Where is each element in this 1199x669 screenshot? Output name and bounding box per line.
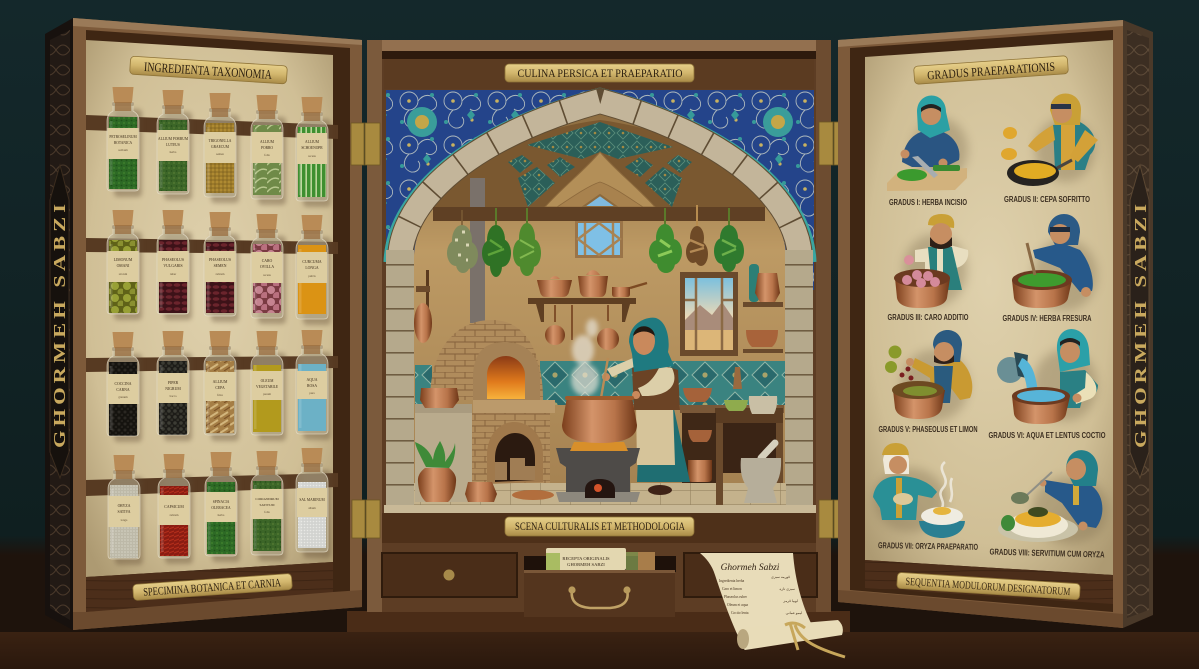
jar 8: rubrum [216,272,225,276]
jar 7: PHASEOLUS [162,258,184,262]
jar 5 [296,97,331,207]
recipe lines: لوبیا قرمز [782,598,798,603]
step 7: rice preparation [873,443,978,552]
jar 1: BOTANICA [114,141,133,145]
lattice window [575,221,623,258]
tile spandrel panel [386,90,814,290]
head scarf [629,318,674,372]
jar 1: PETROSELINUM [109,135,137,139]
heading plaque: culina persica et praeparatio [505,64,694,82]
step 4 label: GRADUS IV: HERBA FRESURA [1002,313,1092,323]
jar 19: CORIANDRUM [255,497,279,501]
jar 18: OLERACEA [211,506,231,510]
right spine with title [1123,20,1153,628]
jar 16: SATIVA [117,510,131,514]
jar 1 [107,87,142,197]
potted plant [415,441,456,502]
shelf with copper pots [528,270,647,322]
wooden floor [0,632,1199,669]
jar 16: ORYZA [118,504,131,508]
jars row 4 [108,448,331,565]
pitcher [997,357,1023,383]
jar 18: SPINACIA [213,500,230,504]
jar 13: CEPA [215,386,225,390]
jar 8 [204,212,239,322]
shoes [648,485,672,495]
jar 9: CARO [262,259,273,263]
recipe lines: لیمو عمانی [786,610,802,615]
jar 18: herba [218,513,225,517]
jar 9: recens [263,273,272,277]
panel: central kitchen cabinet [347,40,850,632]
jar 16: longa [121,518,128,522]
panel: ingredient taxonomy (left door) [45,18,362,630]
pot with greens [1012,280,1072,308]
jar 4: folia [264,153,270,157]
step 3: meat adding [888,214,969,322]
jar 15: pura [309,391,315,395]
cabinet base [347,611,850,632]
right spine with title: GHORMEH SABZI [1131,200,1150,448]
heading plaque: ingredienta taxonomia: INGREDIENTA TAXONOMIA [144,59,273,82]
scroll: recipe parchment: Ghormeh Sabzi [721,563,780,573]
jar 9 [251,214,286,324]
tile medallions [407,107,437,137]
jar 7: ruber [170,272,176,276]
recipe lines: Coctio lenta [731,611,749,615]
drawer contents: rolled label: RECEPTA ORIGINALIS [562,556,610,561]
recipe lines [719,575,802,615]
herb bunch: mint [714,208,744,272]
drawer contents: rolled label: GHORMEH SABZI [567,562,605,567]
pot 2 [578,270,608,297]
heading plaque: gradus praeparationis: GRADUS PRAEPARATIONIS [927,60,1055,82]
recipe lines: قورمه سبزی [771,575,790,579]
jars row 3 [107,330,331,442]
step 1: herb chopping [887,96,968,207]
jar 3: semen [216,152,224,156]
heading plaque: culina persica et praeparatio: CULINA PERSICA ET PRAEPARATIO [518,68,682,80]
counter and table with vessels [680,367,784,505]
step 7 label: GRADUS VII: ORYZA PRAEPARATIO [878,540,978,552]
jar 5: recens [308,154,317,158]
caption plaque: scena culturalis et methodologia: SCENA CULTURALIS ET METHODOLOGIA [515,521,686,533]
jar 13 [204,331,239,441]
step 2 label: GRADUS II: CEPA SOFRITTO [1004,194,1090,204]
recipe lines: سبزی تازه [779,586,796,591]
jar 6: siccum [119,272,128,276]
scroll: recipe parchment [700,553,845,657]
step 4: fresh herb frying [1002,214,1097,323]
herb bunch: white flowers [447,210,478,273]
jar 11: COCCINA [114,382,132,386]
jar 14: OLEUM [261,379,274,383]
desert window [680,272,738,356]
sleeve arm [607,358,674,396]
jar 20 [296,448,331,558]
jar 9: OVILLA [260,265,274,269]
stove [556,442,640,502]
step 6: water and slow cooking [988,329,1106,440]
jars row 2 [107,210,331,325]
shelf rails [86,115,338,496]
figure [900,96,959,168]
jar 11 [107,332,142,442]
rice bowl [919,521,965,538]
drawer contents: rolled label [524,548,676,572]
step 1 label: GRADUS I: HERBA INCISIO [889,197,967,207]
gold ribbon [785,623,845,657]
vault with mosaic tiles [433,120,767,207]
jar 6: LIMONUM [114,258,133,262]
herb bunch: dark parsley [482,208,511,277]
recipe lines: Oleum et aqua [727,603,748,607]
jar 16 [108,455,143,565]
ladle [1027,472,1052,495]
jar 14 [251,331,286,441]
steam [571,319,599,396]
herb bunch: broad leaves [649,208,682,273]
pot with stew [893,390,945,419]
jar 3 [204,93,239,203]
stone pillars [386,250,414,506]
hair [633,326,655,336]
footer plaque: sequentia modulorum designatorum: SEQUENTIA MODULORUM DESIGNATORUM [905,576,1071,598]
step 8 label: GRADUS VIII: SERVITIUM CUM ORYZA [989,546,1105,560]
bread oven [430,320,555,484]
herb bunch: fresh green [513,208,541,276]
pot with water [1012,396,1070,424]
paper roll [737,620,843,650]
jar 3: TRIGONELLA [209,139,232,143]
lattice window upper [583,195,617,207]
skirt [637,400,690,482]
step 3 label: GRADUS III: CARO ADDITIO [888,312,969,322]
hands [602,373,640,399]
jar 18 [205,452,240,562]
jar 6 [107,210,142,320]
step 8: serving with rice [897,450,1108,600]
copper lid [512,490,554,500]
steam wisps [940,462,952,508]
bodice [632,364,680,410]
hinges [351,122,848,538]
jar 12: PIPER [168,381,179,385]
recipe lines: Ingredienta herba [719,579,745,583]
pot 1 [537,276,572,297]
jar 10 [296,215,331,325]
jar 11: granum [118,395,128,399]
jar 2: LUTEUS [166,143,180,147]
jar 14: purum [263,392,272,396]
step 5: beans and lime [878,330,978,434]
jar 15 [296,330,331,440]
jar 20: SAL MARINUM [299,498,325,502]
plate with rice [998,516,1078,542]
cabinet body [367,40,831,612]
hanging utensils [545,305,619,350]
copper cauldron [562,396,637,443]
recipe lines: Phaseolus ruber [724,595,748,599]
left spine with title [45,18,73,630]
jar 17: CAPSICUM [164,505,184,509]
floor [414,483,786,506]
jar 4: ALLIUM [260,140,275,144]
open centre drawer [524,570,675,617]
jar 7: VULGARIS [163,264,183,268]
spoon [601,358,608,398]
jar 12: bacca [170,394,177,398]
jar 4: PORRO [261,146,273,150]
caption plaque: scena culturalis et methodologia [505,517,694,536]
footer plaque: specimina botanica et carnia: SPECIMINA BOTANICA ET CARNIA [143,577,282,599]
jar 17 [158,454,193,564]
jar 10: CURCUMA [302,260,322,264]
apron [636,405,675,465]
jar 4 [251,95,286,205]
small copper kettle [465,482,497,502]
jar 10: LONGA [305,266,319,270]
right shelves with pottery [743,264,783,353]
jar 8: SEMEN [214,264,227,268]
jar 20: album [308,506,316,510]
left spine with title: GHORMEH SABZI [50,200,69,448]
jar 6: OMANI [117,264,130,268]
jar 19: folia [264,510,270,514]
step 6 label: GRADUS VI: AQUA ET LENTUS COCTIO [988,430,1106,440]
face [633,327,655,355]
jar 8: PHASEOLUS [209,258,231,262]
firewood logs [495,458,535,480]
jar 12: NIGRUM [165,387,181,391]
jar 5: SCHOENOPR [301,146,323,150]
jars row 1 [107,87,331,207]
jar 2: ALLIUM PORRUM [158,137,189,141]
back wall tiles [540,361,785,405]
backing board [86,40,333,577]
jar 13: frixa [217,393,223,397]
water stream [1018,358,1038,393]
hanging herbs [447,205,744,277]
pot with meat [895,278,950,308]
jar 19 [251,451,286,561]
right drawer [684,553,817,597]
step 2: onion frying [1001,94,1098,204]
panel: preparation steps (right door) [838,20,1153,628]
saucepan [612,283,647,297]
frying pan [1007,160,1059,186]
jar 15: AQUA [307,378,318,382]
onions [1003,127,1017,139]
jar 14: VEGETABILE [256,385,279,389]
footer plaque: sequentia modulorum designatorum [897,572,1080,600]
jar 2: herba [170,150,177,154]
jar 15: ROSA [307,384,317,388]
jar 2 [157,90,192,200]
stone arch [386,90,814,262]
parchment backing [865,40,1113,575]
jar 5: ALLIUM [305,140,320,144]
jar 13: ALLIUM [213,380,228,384]
cutting board [887,168,967,191]
jar 11: CARNA [116,388,130,392]
jar 17: rubrum [170,513,179,517]
large stone mortar and pestle [741,443,781,503]
stone bench with copper pot [415,388,472,502]
jar 10: pulvis [308,274,316,278]
oven fire [487,356,525,399]
limes and beans [885,346,914,380]
herb bunch: dried brown [686,205,708,266]
ceiling beam [433,207,765,221]
back chimney pipe [470,178,485,323]
left drawer [382,553,517,597]
jar 1: sativum [118,148,128,152]
interior wall [414,112,786,510]
step 5 label: GRADUS V: PHASEOLUS ET LIMON [878,424,978,434]
jar 7 [157,210,192,320]
jar 19: SATIVUM [259,503,275,507]
jar 12 [157,331,192,441]
hanging copper pan [414,270,432,343]
woman cook [601,318,690,495]
caption band [382,513,816,543]
jar 3: GRAECUM [211,145,230,149]
recipe lines: Caro et limon [722,587,742,591]
